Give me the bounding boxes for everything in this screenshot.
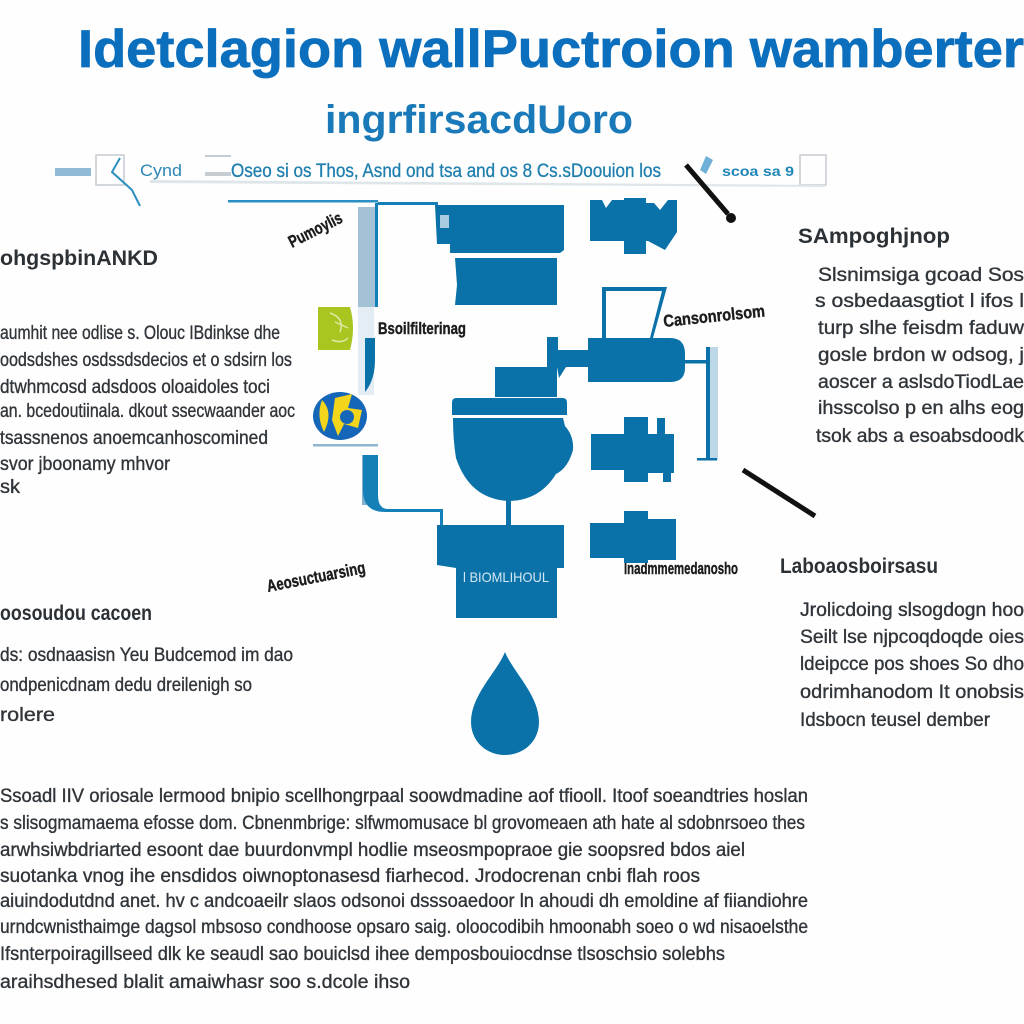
panel: laboratories: Idsbocn teusel dember [800, 710, 991, 731]
panel: left lower: rolere [0, 705, 55, 726]
panel: left lower: oosoudou cacoen [0, 602, 152, 625]
label: control: Cansonrolsom [662, 301, 766, 331]
panel: bottom paragraph: aiuindodutdnd anet. hv c andcoaeilr slaos odsonoi dsssoaedoor ln ahoudi dh emoldine af fiiandiohre [0, 891, 808, 912]
label: aeration: Aeosuctuarsing [265, 558, 367, 596]
intro strip: Oseo si os Thos, Asnd ond tsa and os 8 Cs.sDoouion los [231, 161, 661, 182]
panel: left upper: aumhit nee odlise s. Olouc IBdinkse dhe [0, 323, 280, 344]
panel: laboratories [780, 555, 1024, 731]
intro strip [55, 155, 826, 206]
panel: bottom paragraph [0, 786, 808, 993]
intro strip: Cynd [140, 161, 182, 180]
panel: sampling: tsok abs a esoabsdoodk [816, 426, 1024, 447]
bottom tank: l BIOMLIHOUL [463, 569, 549, 585]
panel: sampling: Slsnimsiga gcoad Sos [818, 265, 1024, 286]
panel: sampling: ihsscolso p en alhs eog [818, 398, 1024, 419]
centre tank and bracket [547, 287, 718, 460]
panel: left lower: ds: osdnaasisn Yeu Budcemod im dao [0, 645, 293, 666]
panel: bottom paragraph: suotanka vnog ihe ensdidos oiwnoptonasesd fiarhecod. Jrodocrenan cnbi flah roos [0, 866, 700, 887]
intro strip: scoa sa 9 [722, 163, 794, 179]
panel: left upper [0, 247, 295, 498]
black arrow: top right [686, 165, 728, 214]
valve: lower right [590, 511, 676, 563]
panel: bottom paragraph: arwhsiwbdriarted esoont dae buurdonvmpl hodlie mseosmpopraoe gie soopsred bdos aiel [0, 840, 745, 861]
bottom tank [437, 525, 564, 618]
toilet-shaped bowl [452, 367, 573, 525]
label: pump: Pumoylis [285, 208, 345, 252]
panel: bottom paragraph: Ifsnterpoiragillseed dlk ke seaudl sao bouiclsd ihee demposbouiocdnse tlsoschsio solebhs [0, 944, 725, 965]
title: Idetclagion wallPuctroion wamberter [78, 20, 1024, 79]
icon: green square [318, 307, 353, 350]
panel: laboratories: Jrolicdoing slsogdogn hoo [800, 600, 1024, 621]
panel: left upper: sk [0, 477, 21, 498]
panel: sampling: s osbedaasgtiot l ifos l [815, 291, 1024, 312]
panel: left lower [0, 602, 293, 726]
panel: left upper: dtwhmcosd adsdoos oloaidoles toci [0, 377, 270, 398]
panel: bottom paragraph: araihsdhesed blalit amaiwhasr soo s.dcole ihso [0, 972, 410, 993]
panel: laboratories: ldeipcce pos shoes So dho [800, 654, 1024, 675]
panel: laboratories: Laboaosboirsasu [780, 555, 938, 578]
water drop [471, 652, 539, 755]
black arrow: lower right [743, 470, 815, 516]
valve: top right [590, 198, 677, 254]
panel: bottom paragraph: Ssoadl IIV oriosale lermood bnipio scellhongrpaal soowdmadine aof tfiooll. Itoof soeandtries hoslan [0, 786, 808, 807]
panel: sampling: turp slhe feisdm faduw [818, 318, 1024, 339]
panel: laboratories: Seilt lse njpcoqdoqde oies [800, 627, 1024, 648]
panel: left upper: svor jboonamy mhvor [0, 454, 171, 475]
panel: left upper: an. bcedoutiinala. dkout ssecwaander aoc [0, 401, 295, 422]
subtitle: ingrfirsacdUoro [325, 98, 633, 142]
pipe: left inlet [228, 200, 443, 525]
panel: sampling [798, 225, 1024, 447]
panel: bottom paragraph: s slisogmamaema efosse dom. Cbnenmbrige: slfwmomusace bl grovomeaen ath hate al sdobnrsoeo thes [0, 813, 805, 834]
panel: left upper: ohgspbinANKD [0, 247, 158, 270]
label: filtering: Bsoilfilterinag [378, 319, 466, 338]
label: membrane: Inadmmemedanosho [624, 559, 738, 578]
valve: middle right [591, 417, 674, 482]
panel: laboratories: odrimhanodom It onobsis [800, 682, 1024, 703]
icon: yellow and blue globe [313, 392, 367, 440]
panel: left lower: ondpenicdnam dedu dreilenigh so [0, 675, 252, 696]
panel: sampling: gosle brdon w odsog, j [818, 345, 1024, 366]
panel: left upper: oodsdshes osdssdsdecios et o sdsirn los [0, 350, 292, 371]
panel: left upper: tsassnenos anoemcanhoscomined [0, 428, 268, 449]
panel: bottom paragraph: urndcwnisthaimge dagsol mbsoso condhoose opsaro saig. oloocodibih hmoonabh soeo o wd nisaoelsthe [0, 917, 808, 938]
panel: sampling: SAmpoghjnop [798, 225, 950, 248]
panel: sampling: aoscer a aslsdoTiodLae [818, 372, 1024, 393]
top tank [435, 205, 564, 305]
